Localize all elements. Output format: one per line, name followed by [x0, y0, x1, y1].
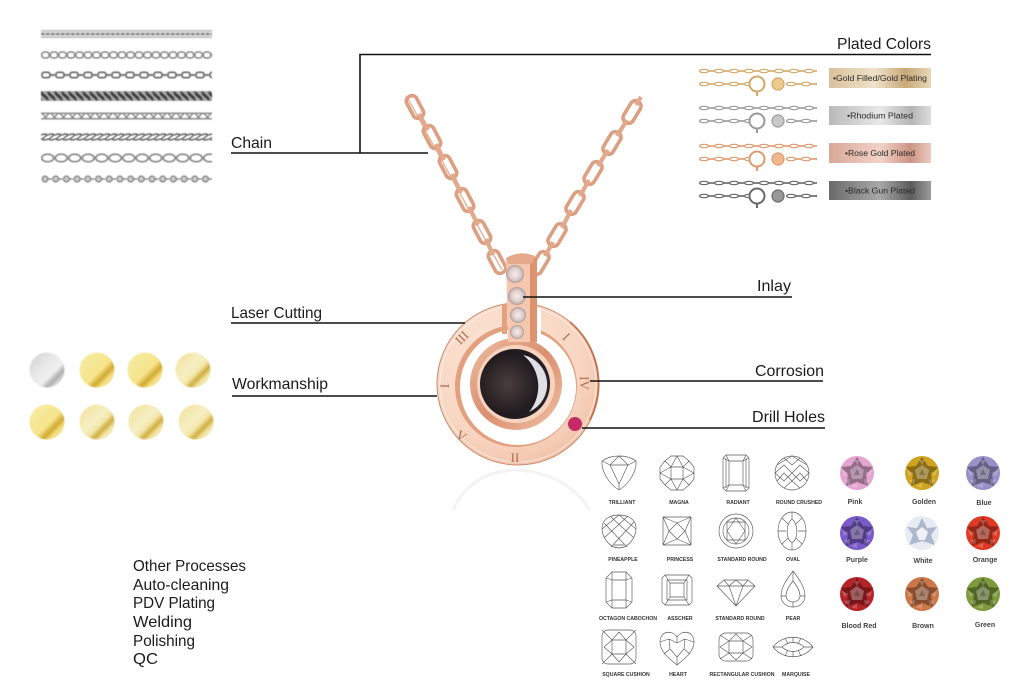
gem: orange: Orange — [973, 557, 997, 564]
other processes list — [133, 558, 246, 668]
plating swatch: gold — [829, 68, 931, 88]
label: Plated Colors: Plated Colors — [837, 36, 931, 53]
pink drill-hole stone — [568, 417, 582, 431]
cut: round crushed — [775, 456, 822, 506]
label: Chain: Chain — [231, 135, 272, 152]
necklace pendant — [405, 94, 643, 510]
cut: oval: OVAL — [786, 557, 801, 563]
cut: pear: PEAR — [786, 616, 800, 622]
gem cut shapes grid — [599, 455, 822, 678]
other processes list: Polishing — [133, 633, 195, 650]
callout lines — [231, 54, 931, 428]
cut: rectangular cushion: RECTANGULAR CUSHION — [709, 672, 775, 678]
chain samples — [41, 30, 212, 183]
plating swatch: rose gold: •Rose Gold Plated — [845, 149, 915, 158]
label: Inlay: Inlay — [757, 278, 791, 295]
cut: octagon cabochon — [599, 572, 657, 622]
gem: golden — [905, 456, 939, 506]
cut: pineapple — [602, 515, 638, 563]
right chain — [529, 97, 643, 276]
pendant reflection — [453, 470, 590, 510]
cut: octagon cabochon: OCTAGON CABOCHON — [599, 616, 657, 622]
cut: radiant — [723, 455, 751, 506]
cut: standard round side: STANDARD ROUND — [715, 616, 765, 622]
gold chain sample — [699, 68, 817, 96]
other processes list: QC — [133, 651, 158, 668]
roman numerals: I — [560, 330, 573, 343]
gem: purple — [840, 516, 874, 564]
cut: oval — [778, 512, 806, 563]
bail with stones — [502, 253, 541, 342]
gem: blue — [966, 456, 1000, 507]
gem: blood red: Blood Red — [842, 623, 876, 630]
cut: standard round — [717, 514, 767, 563]
gem: brown: Brown — [912, 623, 934, 630]
cut: pineapple: PINEAPPLE — [608, 557, 638, 563]
cut: magna — [660, 456, 694, 506]
gem: green: Green — [975, 622, 995, 629]
cut: trilliant — [602, 456, 636, 506]
gem: golden: Golden — [912, 499, 936, 506]
label: Drill Holes: Drill Holes — [752, 409, 825, 426]
gem: white: White — [913, 558, 933, 565]
other processes list: Auto-cleaning — [133, 577, 229, 594]
roman numerals — [437, 328, 592, 465]
cut: standard round side — [715, 580, 765, 622]
other processes list: Other Processes — [133, 558, 246, 575]
roman numerals: I — [437, 384, 452, 388]
cut: round crushed: ROUND CRUSHED — [776, 500, 822, 506]
other processes list: PDV Plating — [133, 595, 215, 612]
cut: heart — [660, 632, 694, 678]
label: Corrosion: Corrosion — [755, 363, 824, 380]
cut: princess — [663, 517, 694, 563]
plating swatch: gold: •Gold Filled/Gold Plating — [833, 74, 927, 83]
workmanship finish discs — [30, 352, 214, 440]
roman numerals: IV — [577, 376, 592, 390]
cut: asscher — [662, 575, 693, 622]
cut: magna: MAGNA — [669, 500, 689, 506]
cut: standard round: STANDARD ROUND — [717, 557, 767, 563]
left chain — [405, 94, 507, 275]
gem: pink: Pink — [848, 499, 862, 506]
cut: marquise: MARQUISE — [782, 672, 811, 678]
gem: pink — [840, 456, 874, 506]
cut: asscher: ASSCHER — [667, 616, 693, 622]
gem: orange — [966, 516, 1000, 564]
cut: square cushion — [602, 630, 650, 678]
cut: trilliant: TRILLIANT — [609, 500, 636, 506]
cut: radiant: RADIANT — [726, 500, 751, 506]
gem: purple: Purple — [846, 557, 868, 564]
plating swatch: rhodium — [829, 106, 931, 125]
pendant ring — [437, 303, 599, 465]
plated colors panel — [699, 68, 931, 208]
cut: rectangular cushion — [709, 633, 775, 678]
cut: princess: PRINCESS — [667, 557, 694, 563]
rose gold chain sample — [699, 143, 817, 171]
label: Laser Cutting: Laser Cutting — [231, 305, 322, 322]
other processes list: Welding — [133, 614, 192, 631]
gemstone colour swatches — [840, 456, 1000, 630]
cut: square cushion: SQUARE CUSHION — [602, 672, 650, 678]
gem: brown — [905, 577, 939, 630]
gun black chain sample — [699, 180, 817, 208]
plating swatch: rhodium: •Rhodium Plated — [847, 112, 913, 120]
gem: blood red — [840, 577, 876, 630]
plating swatch: black gun — [829, 181, 931, 200]
roman numerals: II — [511, 450, 519, 465]
roman numerals: III — [452, 328, 472, 348]
rhodium chain sample — [699, 105, 817, 133]
gem: white — [905, 516, 939, 565]
plating swatch: rose gold — [829, 143, 931, 163]
gem: blue: Blue — [976, 500, 992, 507]
gem: green — [966, 577, 1000, 629]
cut: heart: HEART — [669, 672, 688, 678]
center stone — [480, 349, 550, 419]
label: Workmanship: Workmanship — [232, 376, 328, 393]
plating swatch: black gun: •Black Gun Plated — [845, 186, 915, 196]
cut: marquise — [773, 637, 813, 678]
cut: pear — [781, 571, 805, 622]
roman numerals: V — [453, 427, 470, 445]
